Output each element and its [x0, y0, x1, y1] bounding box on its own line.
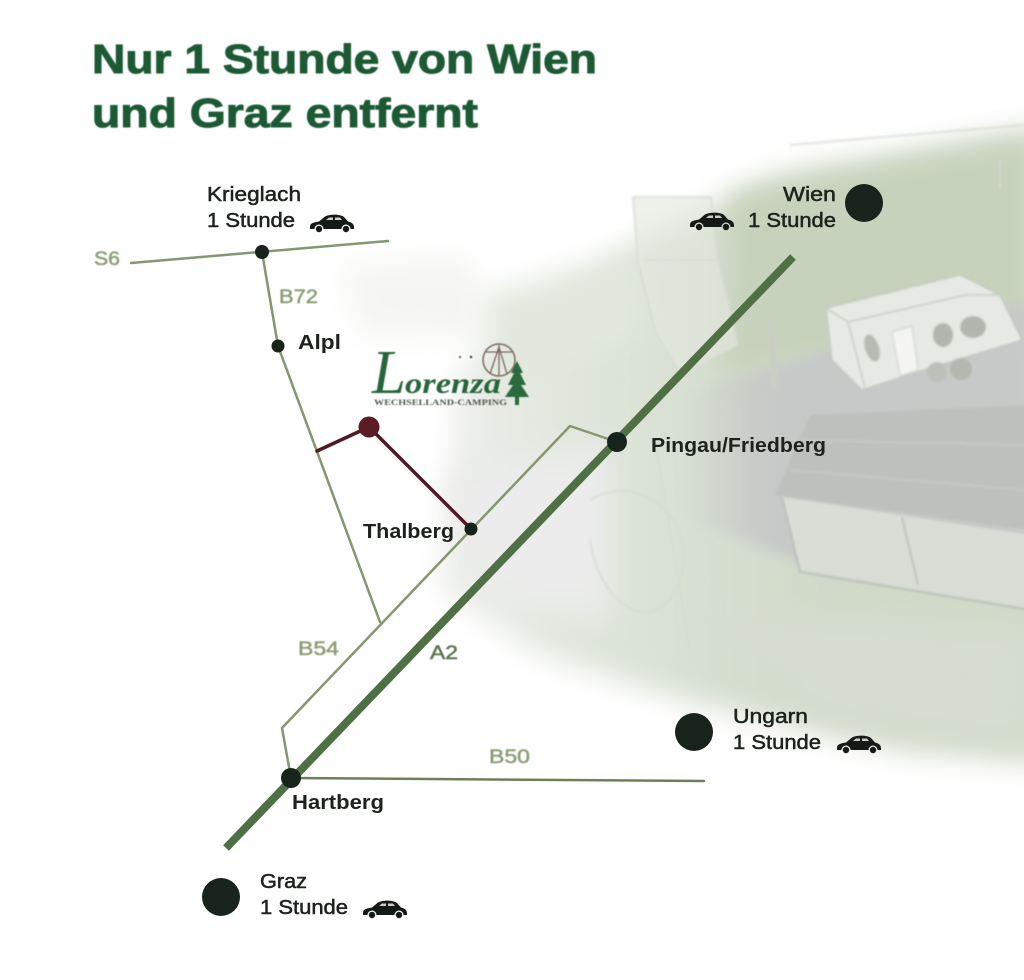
paved pitch — [680, 300, 1024, 600]
label: Pingau/Friedberg: Pingau/Friedberg — [651, 435, 826, 457]
label: Alpl: Alpl — [298, 332, 341, 354]
label: Wien — [690, 184, 836, 232]
label: Krieglach — [207, 184, 354, 232]
title: Nur 1 Stunde von Wien — [92, 36, 597, 82]
title — [92, 36, 597, 136]
logo: Lorenza camping — [371, 339, 529, 407]
label: Graz: Graz — [260, 871, 307, 893]
label: Graz — [260, 871, 407, 919]
road labels: A2 — [430, 643, 458, 664]
background sketch: faded camping scene — [340, 125, 1024, 765]
location markers — [202, 184, 883, 916]
label: Hartberg: Hartberg — [292, 792, 384, 814]
label: Graz: 1 Stunde — [260, 897, 348, 919]
road labels: B50 — [489, 747, 530, 768]
caravan — [826, 275, 1022, 390]
road B72 — [262, 252, 380, 622]
label: Krieglach: 1 Stunde — [207, 210, 295, 232]
table top — [775, 405, 1024, 530]
folding chair and post sketches — [590, 125, 1024, 691]
motorway A2 — [226, 257, 793, 848]
label: Thalberg: Thalberg — [363, 521, 454, 543]
road S6 — [131, 241, 388, 263]
green landscape wash — [340, 125, 1024, 765]
label: Ungarn — [733, 706, 881, 754]
title: und Graz entfernt — [92, 90, 478, 136]
road labels: B54 — [298, 639, 340, 660]
road labels: S6 — [94, 249, 120, 270]
label: Wien: Wien — [783, 184, 836, 206]
logo: Lorenza camping: orenza — [405, 367, 501, 400]
road B54 — [282, 426, 617, 778]
road map — [131, 241, 793, 848]
road B50 — [291, 778, 704, 781]
logo: Lorenza camping: L — [371, 339, 406, 407]
label: Wien: 1 Stunde — [748, 210, 836, 232]
logo: Lorenza camping: WECHSELLAND-CAMPING — [374, 398, 507, 407]
route to campsite — [317, 427, 471, 529]
label: Ungarn: 1 Stunde — [733, 732, 821, 754]
table front — [782, 497, 1024, 608]
campsite marker — [358, 416, 380, 438]
label: Ungarn: Ungarn — [733, 706, 808, 728]
label: Krieglach: Krieglach — [207, 184, 301, 206]
road labels — [94, 249, 530, 768]
road labels: B72 — [279, 287, 318, 308]
